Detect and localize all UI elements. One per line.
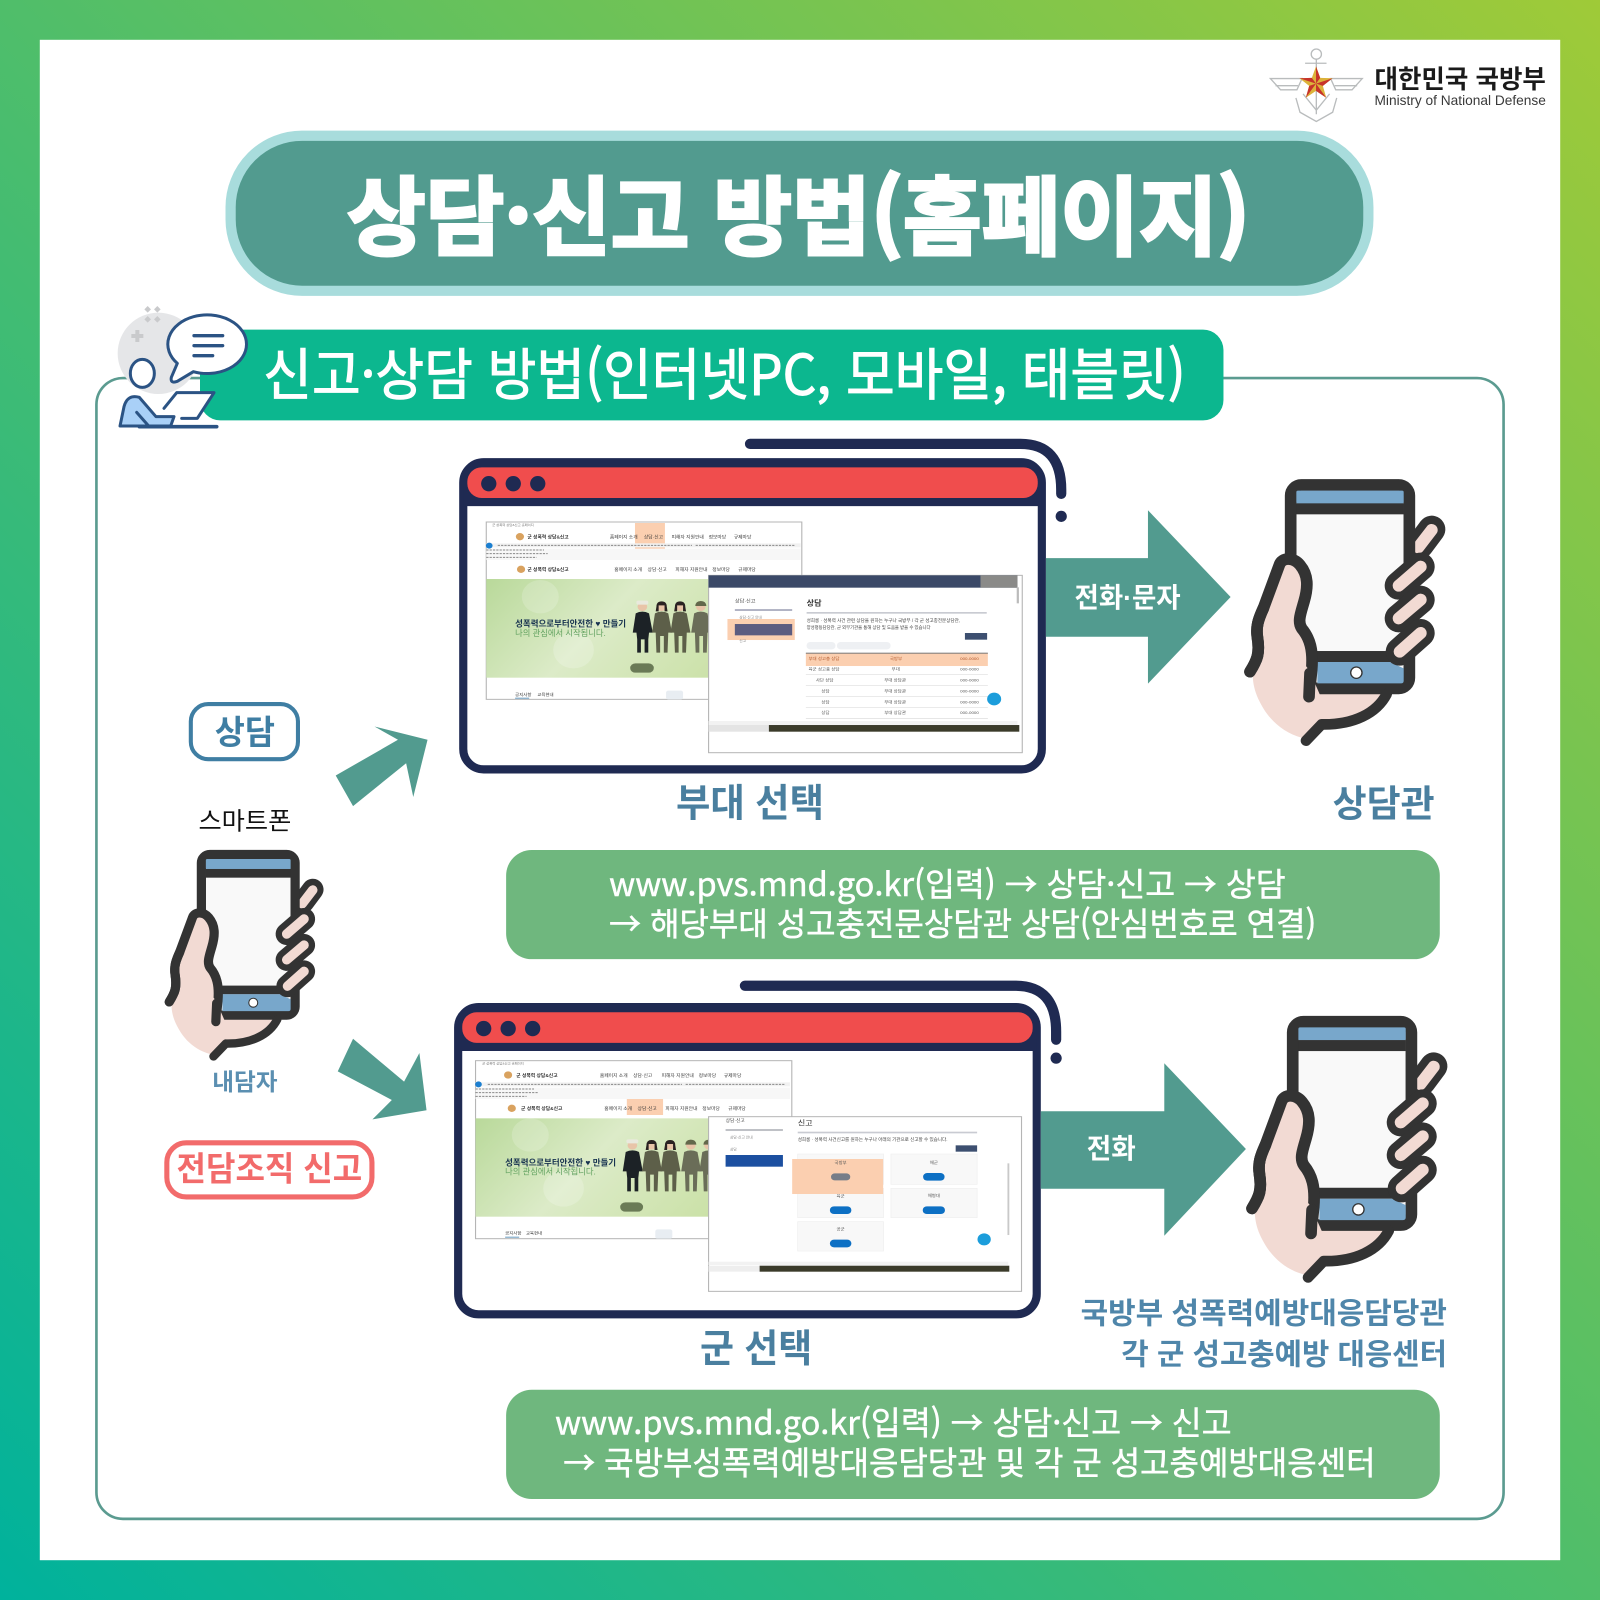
screenshot: homepage and counseling page: 정보마당 bbox=[712, 566, 731, 573]
screenshot: homepage and counseling page: 부대 상담관 bbox=[884, 699, 906, 705]
icon: officer phone in hand bbox=[1252, 1022, 1434, 1277]
screenshot: homepage and counseling page: 사단 상담 bbox=[816, 677, 834, 683]
screenshot: homepage and report page: 군 성폭력 상담&신고 bbox=[521, 1105, 562, 1112]
screenshot: homepage and counseling page: 군 성폭력 상담&신고 bbox=[527, 566, 569, 573]
screenshot: homepage and counseling page: 성폭력으로부터안전한 ♥ 만들기 bbox=[515, 618, 626, 629]
screenshot: homepage and report page: 상담·신고 bbox=[633, 1072, 652, 1078]
screenshot: homepage and report page: 군 성폭력 상담&신고 bbox=[516, 1072, 558, 1079]
screenshot: homepage and report page: 해군 bbox=[930, 1159, 938, 1166]
badge: counseling bbox=[191, 704, 298, 759]
screenshot: homepage and report page: 상담·신고 bbox=[726, 1117, 745, 1123]
screenshot: homepage and counseling page: 규제마당 bbox=[734, 534, 752, 540]
instruction box: counseling: www.pvs.mnd.go.kr(입력) → 상담·신고 → 상담 bbox=[609, 859, 1286, 906]
screenshot: homepage and counseling page: 000-0000 bbox=[960, 678, 980, 682]
icon: counselor phone in hand bbox=[1250, 485, 1432, 741]
screenshot: homepage and report page: 국방부 bbox=[835, 1159, 847, 1166]
screenshot: homepage and counseling page: 상담·신고 bbox=[648, 566, 667, 572]
screenshot: homepage and report page: 교육현내 bbox=[526, 1230, 542, 1237]
screenshot: homepage and counseling page: 공지사항 bbox=[515, 691, 532, 698]
badge: dedicated report bbox=[167, 1143, 372, 1197]
label: unit selection: 부대 선택 bbox=[676, 782, 824, 825]
screenshot: homepage and counseling page: 상담 bbox=[821, 688, 830, 693]
screenshot: homepage and counseling page: 000-0000 bbox=[960, 700, 980, 704]
screenshot: homepage and report page: 피해자 지원안내 bbox=[662, 1072, 694, 1079]
screenshot: homepage and counseling page: 상담·신고 bbox=[644, 534, 663, 539]
screenshot: homepage and report page: 홈페이지 소개 bbox=[600, 1072, 628, 1079]
title pill bbox=[231, 136, 1368, 291]
icon: emblem bbox=[1270, 49, 1362, 121]
label: counselor: 상담관 bbox=[1333, 783, 1435, 824]
screenshot: homepage and counseling page: 홈페이지 소개 bbox=[614, 566, 642, 573]
screenshot: homepage and counseling page: 교육현내 bbox=[537, 691, 554, 698]
label: service selection: 군 선택 bbox=[700, 1328, 812, 1371]
screenshot: homepage and counseling page: 성희롱 · 성폭력 사건 관련 상담을 원하는 누구나 국방부 / 각 군 성고충전문상담관, bbox=[807, 617, 960, 624]
screenshot: homepage and report page: 군 성폭력 상담&신고 홈페이지 bbox=[482, 1061, 524, 1066]
screenshot: homepage and report page: 정보마당 bbox=[699, 1072, 717, 1079]
screenshot: homepage and counseling page: 상담 bbox=[821, 699, 830, 704]
badge: counseling: 상담 bbox=[215, 714, 275, 752]
screenshot: homepage and report page: 성폭력으로부터안전한 ♥ 만들기 bbox=[505, 1157, 616, 1167]
label: smartphone: 스마트폰 bbox=[198, 808, 291, 836]
label: officers and centers: 각 군 성고충예방 대응센터 bbox=[1121, 1338, 1447, 1371]
screenshot: homepage and counseling page: 홈페이지 소개 bbox=[610, 534, 638, 540]
label: client: 내담자 bbox=[212, 1069, 278, 1095]
outer frame panel bbox=[96, 378, 1504, 1519]
arrow: phone bbox=[1041, 1063, 1246, 1236]
screenshot: homepage and report page: 나의 관심에서 시작됩니다. bbox=[505, 1167, 596, 1177]
screenshot: homepage and counseling page: 규제마당 bbox=[738, 566, 757, 573]
instruction box: report: www.pvs.mnd.go.kr(입력) → 상담·신고 → 신고 bbox=[555, 1398, 1232, 1445]
screenshot: homepage and report page: 상담 bbox=[730, 1147, 738, 1151]
screenshot: homepage and counseling page: 000-0000 bbox=[960, 710, 980, 715]
screenshot: homepage and counseling page: 국방부 bbox=[890, 655, 902, 662]
screenshot: homepage and counseling page: 부대 상담관 bbox=[884, 688, 906, 694]
screenshot: homepage and counseling page: 군 성폭력 상담&신고 bbox=[527, 534, 569, 540]
screenshot: homepage and report page: 규제마당 bbox=[724, 1072, 742, 1079]
screenshot: homepage and report page: 상담·신고 bbox=[638, 1105, 657, 1111]
screenshot: homepage and counseling page: 상담·신고 안내 bbox=[739, 615, 762, 620]
icon: person with laptop and speech bubble bbox=[118, 306, 246, 427]
screenshot: homepage and counseling page: 군 성폭력 상담&신고 홈페이지 bbox=[492, 522, 534, 527]
screenshot: homepage and report page: 상담·신고 안내 bbox=[730, 1135, 753, 1140]
arrow: to service selection bbox=[338, 1039, 427, 1119]
arrow: phone: 전화 bbox=[1087, 1133, 1136, 1164]
screenshot: homepage and counseling page: 부대 상담관 bbox=[884, 677, 906, 683]
label: officers and centers bbox=[1081, 1297, 1447, 1371]
screenshot: homepage and counseling page: 000-0000 bbox=[960, 689, 980, 693]
browser window: service selection bbox=[458, 986, 1062, 1314]
section heading bar bbox=[200, 330, 1223, 420]
screenshot: homepage and counseling page: 000-0000 bbox=[960, 667, 980, 672]
arrow: to unit selection bbox=[336, 727, 428, 806]
arrow: phone and text: 전화·문자 bbox=[1074, 582, 1181, 613]
screenshot: homepage and counseling page: 피해자 지원안내 bbox=[675, 566, 707, 573]
screenshot: homepage and counseling page bbox=[486, 522, 1022, 753]
screenshot: homepage and counseling page: 육군 성고충 상담 bbox=[808, 666, 840, 673]
arrow: phone and text bbox=[1046, 510, 1231, 684]
screenshot: homepage and counseling page: 양성평등담당관, 군 외부기관을 통해 상담 및 도움을 받을 수 있습니다 bbox=[807, 624, 931, 631]
screenshot: homepage and counseling page: 신고 bbox=[739, 638, 747, 643]
screenshot: homepage and counseling page: 상담·신고 bbox=[735, 598, 756, 604]
screenshot: homepage and counseling page: 피해자 지원안내 bbox=[672, 534, 704, 540]
screenshot: homepage and report page: 해병대 bbox=[928, 1192, 940, 1199]
screenshot: homepage and counseling page: 상담 bbox=[807, 598, 822, 608]
badge: dedicated report: 전담조직 신고 bbox=[177, 1151, 362, 1189]
screenshot: homepage and report page: 육군 bbox=[837, 1194, 845, 1200]
instruction box: counseling bbox=[506, 850, 1440, 959]
screenshot: homepage and report page: 홈페이지 소개 bbox=[604, 1105, 632, 1112]
title text: 상담·신고 방법(홈페이지) bbox=[347, 149, 1250, 273]
logo: Ministry of National Defense bbox=[1270, 49, 1546, 121]
screenshot: homepage and counseling page: 정보마당 bbox=[709, 534, 727, 540]
screenshot: homepage and counseling page: 나의 관심에서 시작됩니다. bbox=[515, 628, 606, 638]
section heading text: 신고·상담 방법(인터넷PC, 모바일, 태블릿) bbox=[263, 331, 1186, 412]
instruction box: counseling: → 해당부대 성고충전문상담관 상담(안심번호로 연결) bbox=[609, 899, 1316, 946]
screenshot: homepage and report page bbox=[475, 1061, 1022, 1291]
label: officers and centers: 국방부 성폭력예방대응담당관 bbox=[1081, 1297, 1447, 1330]
screenshot: homepage and counseling page: 부대 bbox=[892, 666, 900, 673]
instruction box: report: → 국방부성폭력예방대응담당관 및 각 군 성고충예방대응센터 bbox=[563, 1437, 1376, 1484]
screenshot: homepage and counseling page: 000-0000 bbox=[960, 656, 980, 661]
screenshot: homepage and report page: 신고 bbox=[798, 1119, 813, 1127]
logo name English: Ministry of National Defense bbox=[1374, 93, 1546, 109]
screenshot: homepage and report page: 공지사항 bbox=[505, 1230, 522, 1237]
screenshot: homepage and report page: 공군 bbox=[837, 1227, 845, 1232]
screenshot: homepage and report page: 성희롱 · 성폭력 사건신고를 원하는 누구나 아래의 기관으로 신고할 수 있습니다. bbox=[798, 1136, 948, 1143]
screenshot: homepage and report page: 피해자 지원안내 bbox=[665, 1105, 697, 1112]
screenshot: homepage and counseling page: 부대 성고충 상담 bbox=[808, 655, 840, 662]
browser window: unit selection bbox=[463, 444, 1067, 769]
instruction box: report bbox=[506, 1390, 1440, 1499]
screenshot: homepage and report page: 정보마당 bbox=[702, 1105, 721, 1112]
icon: client phone in hand bbox=[169, 854, 313, 1056]
screenshot: homepage and report page: 규제마당 bbox=[728, 1105, 747, 1112]
logo name Korean: 대한민국 국방부 bbox=[1374, 66, 1546, 94]
screenshot: homepage and counseling page: 부대 상담관 bbox=[884, 709, 906, 716]
screenshot: homepage and counseling page: 상담 bbox=[821, 709, 830, 715]
